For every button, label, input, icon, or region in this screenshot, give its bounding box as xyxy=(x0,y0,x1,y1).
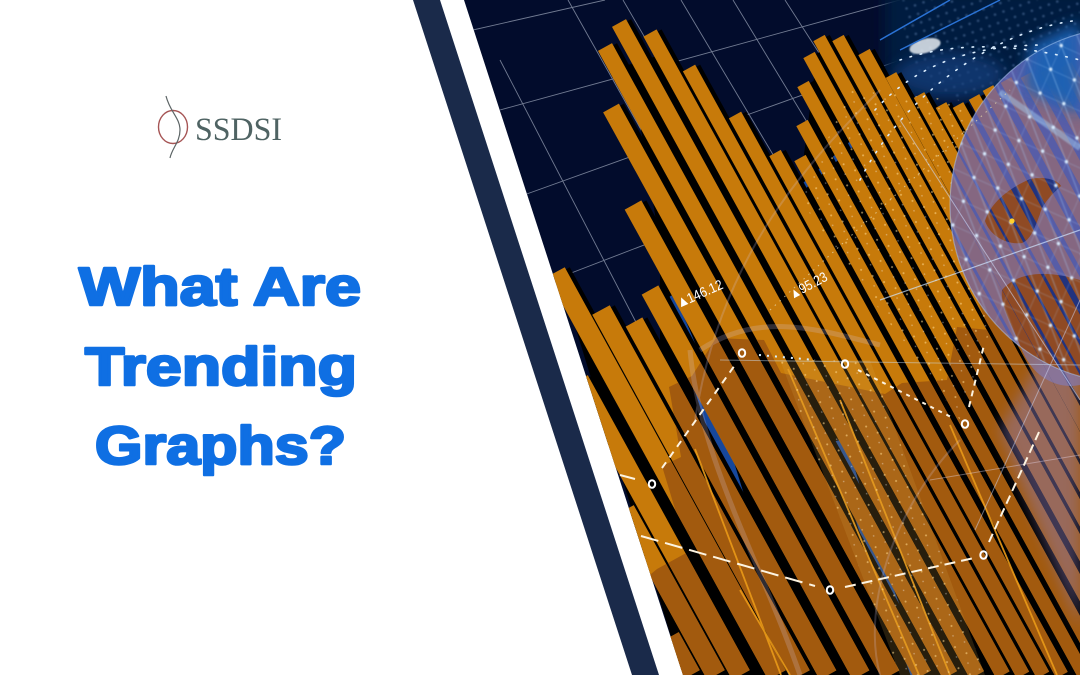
title line 2: Trending xyxy=(85,337,357,397)
globe blue cap xyxy=(1025,22,1080,115)
bars: shadows xyxy=(554,19,986,672)
globe rim xyxy=(950,27,1080,383)
bars: brown lower layer xyxy=(650,300,1080,675)
value label 146.12 xyxy=(681,280,724,308)
lavender arcs over chart xyxy=(690,90,960,675)
value label 95.23 xyxy=(793,272,828,298)
photo background xyxy=(460,0,1080,675)
diagonal navy stripe xyxy=(413,0,659,675)
purple haze lower right xyxy=(1000,340,1080,630)
photo panel: trending bar chart with globe xyxy=(460,0,1080,675)
logo wordmark: SSDSI xyxy=(195,112,282,148)
globe surface with land cut-outs xyxy=(950,27,1080,386)
up marker xyxy=(681,298,688,308)
bright gold highlight lines on bars xyxy=(695,369,1057,675)
dark haze with city lights, top right xyxy=(885,0,1080,100)
chart grid lines xyxy=(464,0,900,330)
blue streaks behind bars xyxy=(670,142,912,675)
black floor under bars xyxy=(570,55,1080,675)
yellow city light xyxy=(1009,218,1015,224)
globe network mesh xyxy=(950,27,1080,383)
network lines and dotted orbits xyxy=(720,0,1080,530)
dashed trend line xyxy=(620,345,1039,587)
bars: orange upper layer xyxy=(556,23,1080,675)
value: 95.23 xyxy=(796,268,830,297)
up marker xyxy=(793,290,800,298)
trend line markers xyxy=(649,349,987,594)
title xyxy=(79,257,361,476)
title line 1: What Are xyxy=(79,257,361,317)
value: 146.12 xyxy=(684,276,725,306)
globe bars tinted brown xyxy=(950,34,1080,376)
globe xyxy=(949,16,1080,386)
globe light band xyxy=(1000,92,1080,148)
speckled light band over bars xyxy=(780,90,1000,675)
title line 3: Graphs? xyxy=(95,416,346,476)
icon: logo ring with curve xyxy=(158,96,188,158)
logo: SSDSI xyxy=(158,96,282,158)
